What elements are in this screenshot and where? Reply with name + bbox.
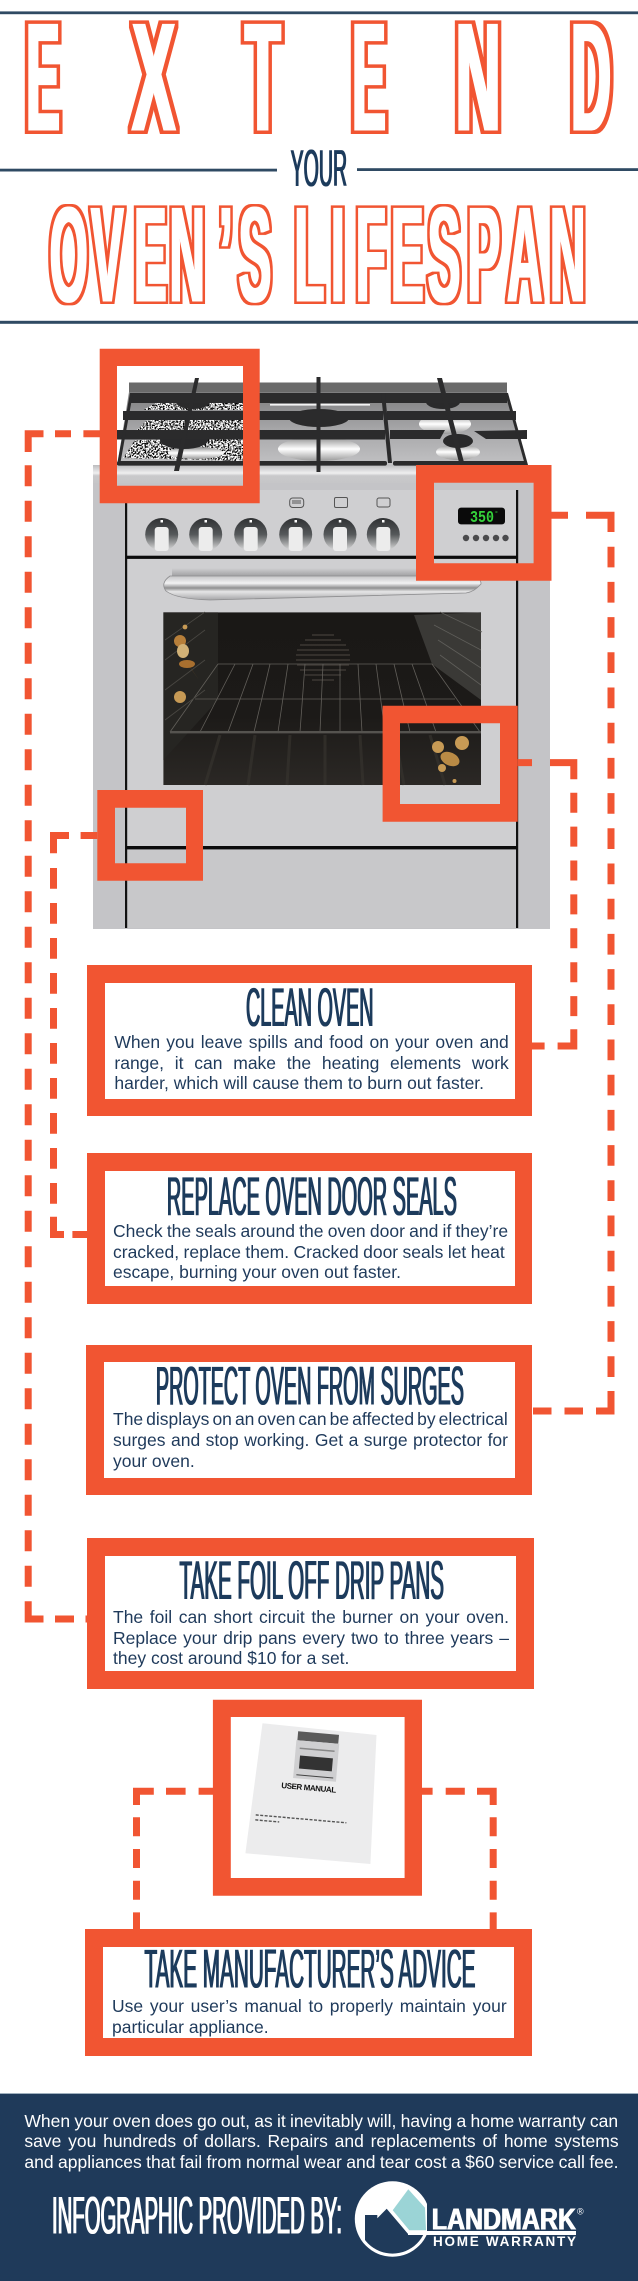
- header rule: right of YOUR: [357, 168, 638, 171]
- connector: burner to foil panel: [28, 434, 100, 1619]
- oven body: [93, 480, 550, 929]
- text: door seals: Check the seals around the oven door and if they’re: [113, 1221, 508, 1241]
- user manual booklet: [245, 1723, 376, 1864]
- foil on drip pans: [123, 400, 243, 461]
- temperature display: [458, 508, 509, 541]
- footer text: and appliances that fail from normal wear and tear cost a $60 service call fee.: [24, 2152, 619, 2172]
- highlight frame: display: [416, 465, 552, 581]
- temperature display: 350: [470, 509, 494, 528]
- text: surges: your oven.: [113, 1451, 195, 1471]
- highlight frame: door seal: [97, 790, 203, 881]
- text: advice: particular appliance.: [112, 2017, 269, 2037]
- connector: door seal to seals panel: [54, 836, 97, 1234]
- text: clean oven: range, it can make the heating elements work: [114, 1053, 509, 1073]
- connector: spill to clean panel: [518, 763, 574, 1046]
- logo: Landmark Home Warranty: [355, 2181, 584, 2261]
- logo: Landmark Home Warranty: ®: [577, 2206, 584, 2216]
- highlight frame: burner: [100, 349, 260, 503]
- title: OVEN'S LIFESPAN: OVEN’S LIFESPAN: [50, 178, 585, 331]
- panel: take manufacturer's advice: [85, 1929, 532, 2056]
- panel: replace oven door seals: [87, 1153, 532, 1304]
- oven floor: [205, 735, 445, 785]
- oven window: [163, 612, 482, 785]
- text: door seals: [113, 1221, 508, 1282]
- user manual booklet: USER MANUAL: [281, 1781, 337, 1795]
- panel: protect oven from surges: [86, 1345, 532, 1495]
- user manual frame: [213, 1700, 422, 1896]
- text: foil: Replace your drip pans every two to three years –: [113, 1628, 509, 1648]
- text: door seals: cracked, replace them. Cracked door seals let heat: [113, 1242, 505, 1262]
- title: EXTEND: [26, 0, 611, 164]
- header rule: left of YOUR: [0, 169, 277, 172]
- text: foil: The foil can short circuit the burner on your oven.: [113, 1607, 509, 1627]
- panel: take foil off drip pans: [87, 1538, 534, 1689]
- connector: manual to advice panel, left: [136, 1791, 213, 1930]
- fan grille: [296, 635, 350, 680]
- text: advice: Use your user’s manual to properly maintain your: [112, 1996, 507, 2016]
- oven rack: [165, 612, 482, 732]
- footer band: [0, 2093, 638, 2281]
- panel: clean oven: [87, 965, 532, 1116]
- logo: Landmark Home Warranty: LANDMARK: [432, 2202, 576, 2237]
- grates: [117, 377, 528, 472]
- cooktop: [93, 377, 550, 483]
- text: clean oven: When you leave spills and food on your oven and: [114, 1032, 509, 1052]
- text: advice: [112, 1996, 507, 2037]
- text: foil: [113, 1607, 509, 1668]
- burner bowls: [168, 404, 480, 461]
- header rule: top: [0, 11, 638, 14]
- control knobs: [145, 518, 400, 551]
- footer text: save you hundreds of dollars. Repairs and replacements of home systems: [24, 2131, 619, 2151]
- oven illustration: [93, 377, 550, 929]
- highlight frame: oven spill: [383, 706, 518, 822]
- burner caps: [160, 395, 473, 449]
- text: surges: surges and stop working. Get a surge protector for: [113, 1430, 508, 1450]
- connector: display to surge panel: [533, 515, 611, 1411]
- text: door seals: escape, burning your oven out faster.: [113, 1262, 401, 1282]
- knob function icons: [290, 498, 390, 508]
- footer text: [24, 2110, 619, 2172]
- text: foil: they cost around $10 for a set.: [113, 1648, 349, 1668]
- food spills: [174, 625, 469, 783]
- heading: clean oven: CLEAN OVEN: [246, 976, 374, 1038]
- door handle: [164, 568, 481, 600]
- logo: Landmark Home Warranty: HOME WARRANTY: [433, 2234, 576, 2249]
- header rule: bottom: [0, 321, 638, 324]
- temperature display: °: [495, 510, 498, 518]
- connector: manual to advice panel, right: [422, 1791, 493, 1930]
- text: surges: [113, 1408, 508, 1471]
- text: clean oven: harder, which will cause them to burn out faster.: [114, 1073, 484, 1093]
- text: clean oven: [114, 1032, 509, 1093]
- footer text: When your oven does go out, as it inevitably will, having a home warranty can: [24, 2110, 618, 2130]
- text: surges: The displays on an oven can be affected by electrical: [113, 1408, 508, 1428]
- illustration layer: header, oven, connectors: YOUR: [291, 140, 347, 198]
